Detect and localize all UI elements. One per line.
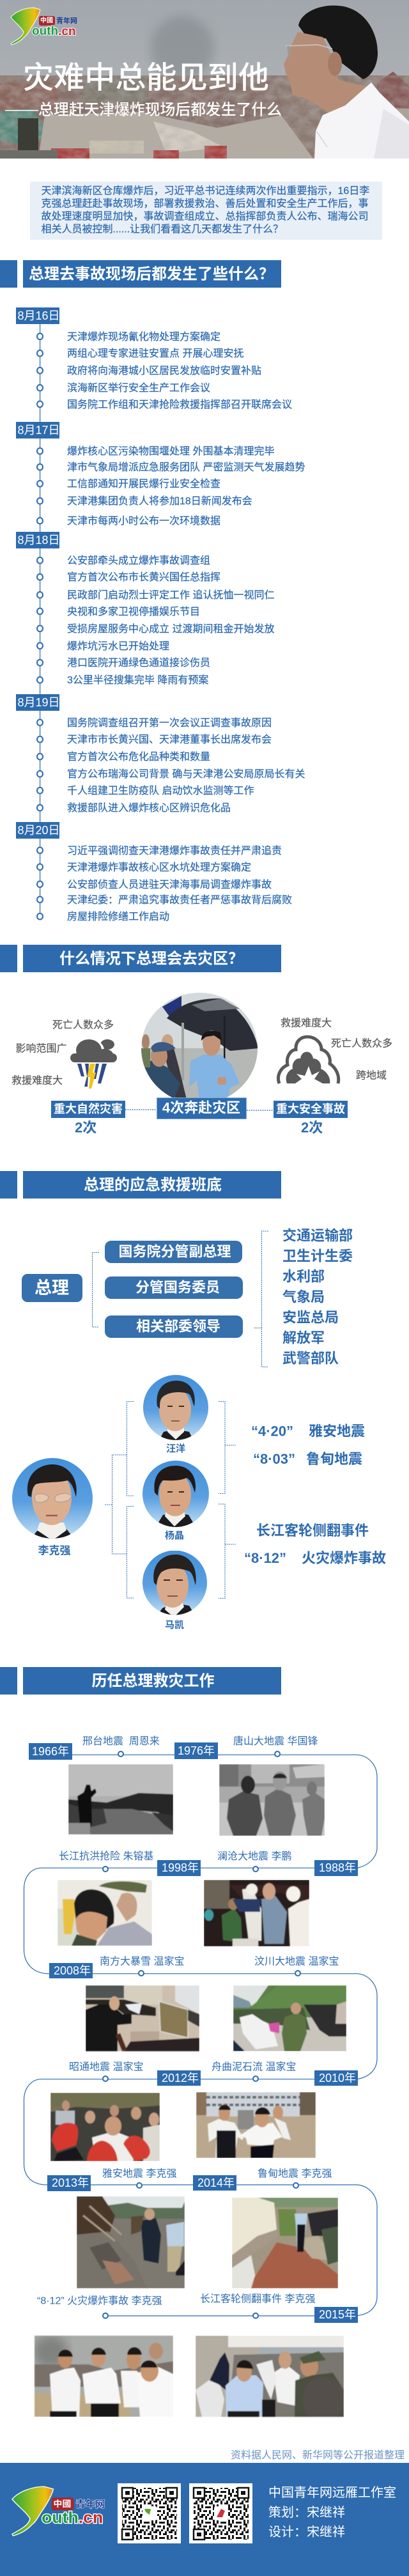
events: Yangtze and 8.12: 火灾爆炸事故 <box>302 1550 386 1566</box>
events 8月18日: 3公里半径搜集完毕 降雨有预案 <box>67 674 208 686</box>
events: Ya'an and Ludian: “8·03” <box>253 1451 295 1467</box>
footer <box>0 2463 409 2576</box>
logo: youth.cn footer: 中國 <box>53 2499 71 2509</box>
photo: 1966 Xingtai <box>68 1764 173 1835</box>
photo: 2008 snowstorm <box>86 1985 199 2052</box>
heading: when the premier goes <box>0 945 281 972</box>
left: natural disaster factors <box>12 1019 117 1089</box>
portrait: 李克强 <box>12 1458 93 1557</box>
portrait: 杨晶 <box>143 1461 209 1541</box>
portrait connectors <box>105 1401 236 1598</box>
year tags: 2013年 <box>52 2176 89 2189</box>
heading: rescue team: 总理的应急救援班底 <box>84 1176 222 1194</box>
date 8月16日: 8月16日 <box>17 309 60 322</box>
events 8月16日: 两组心理专家进驻安置点 开展心理安抚 <box>67 348 243 359</box>
logo: youth.cn footer <box>12 2487 105 2536</box>
events 8月17日 <box>37 445 305 527</box>
year tags: 1998年 <box>162 1861 199 1874</box>
right: safety accident factors: 跨地域 <box>356 1070 387 1082</box>
timeline captions: 邢台地震 周恩来 <box>82 1735 160 1747</box>
photo: 2015 Yangtze <box>196 2336 344 2423</box>
winding timeline path <box>24 1755 377 2316</box>
photo: 1998 Yangtze flood <box>58 1880 152 1946</box>
events: Ya'an and Ludian: 鲁甸地震 <box>306 1451 362 1467</box>
events: Ya'an and Ludian: 雅安地震 <box>309 1423 365 1439</box>
events 8月18日: 民政部门启动烈士评定工作 追认抚恤一视同仁 <box>67 589 274 601</box>
events 8月17日: 工信部通知开展民爆行业安全检查 <box>67 477 220 490</box>
tag: major safety accidents: 2次 <box>301 1120 323 1135</box>
right: safety accident factors <box>278 1018 392 1083</box>
hero banner <box>0 0 409 159</box>
logo: youth.cn footer: outh.cn <box>42 2510 103 2527</box>
box: ministries <box>105 1315 243 1338</box>
logo: youth.cn footer: 青年网 <box>75 2499 105 2510</box>
intro text panel: 故处理速度明显加快，事故调查组成立、总指挥部负责人公布、瑞海公司 <box>41 211 369 222</box>
box: premier: 总理 <box>35 1278 69 1298</box>
events: Ya'an and Ludian <box>251 1423 365 1467</box>
date 8月18日: 8月18日 <box>17 534 60 547</box>
date 8月20日: 8月20日 <box>17 824 60 837</box>
date 8月19日: 8月19日 <box>17 696 60 709</box>
events 8月18日: 央视和多家卫视停播娱乐节目 <box>67 606 200 617</box>
photo: 2013 Ya'an <box>77 2196 185 2288</box>
QR code 2 <box>189 2483 252 2543</box>
photo: 2012 Zhaotong <box>50 2093 160 2161</box>
events 8月20日: 天津港爆炸事故核心区水坑处理方案确定 <box>67 861 251 873</box>
heading: past premiers <box>0 1667 281 1695</box>
right: safety accident factors: 死亡人数众多 <box>331 1038 392 1050</box>
intro text panel: 天津滨海新区仓库爆炸后，习近平总书记连续两次作出重要指示，16日李 <box>41 184 369 197</box>
intro text panel: 相关人员被控制......让我们看看这几天都发生了什么？ <box>41 224 283 235</box>
year tags <box>29 1742 358 2323</box>
footer credits <box>268 2485 396 2540</box>
events 8月20日: 公安部侦查人员进驻天津海事局调查爆炸事故 <box>67 878 272 890</box>
year tags: 1976年 <box>178 1744 215 1757</box>
events: Yangtze and 8.12 <box>244 1523 386 1566</box>
events 8月16日: 政府将向海港城小区居民发放临时安置补贴 <box>67 365 261 376</box>
timeline captions: 汶川大地震 温家宝 <box>254 1956 339 1967</box>
left: natural disaster factors: 影响范围广 <box>15 1043 67 1055</box>
hero subtitle: 总理赶天津爆炸现场后都发生了什么 <box>38 101 282 119</box>
icon: explosion <box>278 1037 339 1083</box>
timeline captions: 雅安地震 李克强 <box>102 2168 176 2180</box>
events 8月20日: 房屋排险修缮工作启动 <box>67 911 169 922</box>
photo: premier under umbrella <box>141 993 258 1106</box>
logo: youth.cn top: 中國 <box>40 16 53 24</box>
events 8月16日: 天津爆炸现场氰化物处理方案确定 <box>67 330 220 343</box>
departments list: 水利部 <box>282 1268 325 1285</box>
photo: 2015 Tianjin <box>33 2335 173 2417</box>
year tags: 2014年 <box>197 2176 235 2189</box>
events 8月19日: 官方首次公布危化品种类和数量 <box>67 751 210 763</box>
events 8月19日: 官方公布瑞海公司背景 确与天津港公安局原局长有关 <box>67 768 305 780</box>
footer credits: 策划：宋继祥 <box>268 2505 345 2520</box>
footer credits: 设计：宋继祥 <box>268 2525 345 2540</box>
events 8月18日: 受损房屋服务中心成立 过渡期间租金开始发放 <box>67 623 274 635</box>
departments list: 解放军 <box>282 1330 325 1346</box>
heading: past premiers: 历任总理救灾工作 <box>92 1672 215 1690</box>
timeline captions: 长江客轮侧翻事件 李克强 <box>200 2293 315 2305</box>
photo: 2008 Wenchuan <box>233 1985 346 2051</box>
departments list: 交通运输部 <box>282 1227 353 1244</box>
portrait: 李克强: 李克强 <box>38 1544 70 1557</box>
events 8月16日 <box>37 330 292 410</box>
date 8月17日: 8月17日 <box>17 424 60 437</box>
year tags: 1966年 <box>32 1745 69 1758</box>
QR code 1 <box>118 2483 181 2543</box>
year tags: 2012年 <box>162 2072 199 2084</box>
portrait: 汪洋 <box>143 1375 208 1454</box>
events 8月16日: 国务院工作组和天津抢险救援指挥部召开联席会议 <box>67 399 292 410</box>
box: premier <box>22 1274 82 1302</box>
logo: youth.cn top <box>11 8 77 45</box>
events 8月19日 <box>37 717 305 814</box>
events 8月20日: 习近平强调彻查天津港爆炸事故责任并严肃追责 <box>67 844 282 857</box>
box: vice premier: 国务院分管副总理 <box>118 1244 231 1259</box>
photo: 1976 Tangshan <box>219 1764 325 1836</box>
tag: four visits <box>157 1098 247 1119</box>
box: vice premier <box>105 1241 242 1263</box>
left: natural disaster factors: 救援难度大 <box>12 1075 63 1087</box>
departments list: 安监总局 <box>282 1309 339 1326</box>
timeline captions: 鲁甸地震 李克强 <box>258 2168 332 2180</box>
events 8月19日: 千人组建卫生防疫队 启动饮水监测等工作 <box>67 785 254 796</box>
timeline captions: 澜沧大地震 李鹏 <box>217 1851 291 1862</box>
events: Yangtze and 8.12: 长江客轮侧翻事件 <box>256 1523 369 1539</box>
tag: major natural disasters: 重大自然灾害 <box>54 1102 123 1115</box>
tag: major natural disasters: 2次 <box>75 1120 96 1135</box>
year tags: 2010年 <box>319 2072 356 2084</box>
events 8月18日: 公安部牵头成立爆炸事故调查组 <box>67 554 210 566</box>
box: state councilor: 分管国务委员 <box>135 1280 220 1295</box>
events 8月19日: 国务院调查组召开第一次会议正调查事故原因 <box>67 717 272 729</box>
events 8月19日: 天津市市长黄兴国、天津港董事长出席发布会 <box>67 734 272 745</box>
timeline captions: 昭通地震 温家宝 <box>69 2061 143 2072</box>
photo: 2010 Zhouqu <box>196 2092 316 2158</box>
timeline captions <box>37 1735 339 2306</box>
photo: 1988 Lancang <box>204 1880 309 1946</box>
timeline captions: 唐山大地震 华国锋 <box>233 1735 318 1747</box>
tag: four visits: 4次奔赴灾区 <box>162 1099 240 1116</box>
events 8月17日: 津市气象局增派应急服务团队 严密监测天气发展趋势 <box>67 461 305 473</box>
right: safety accident factors: 救援难度大 <box>281 1018 332 1029</box>
events 8月16日: 滨海新区举行安全生产工作会议 <box>67 382 210 394</box>
heading: when the premier goes: 什么情况下总理会去灾区？ <box>59 950 243 968</box>
events 8月20日: 天津纪委：严肃追究事故责任者严惩事故背后腐败 <box>67 894 292 906</box>
hero title: 灾难中总能见到他 <box>23 61 269 95</box>
timeline: daily events <box>16 307 305 922</box>
year tags: 2015年 <box>319 2308 356 2321</box>
departments list: 卫生计生委 <box>282 1248 353 1264</box>
events 8月17日: 天津市每两小时公布一次环境数据 <box>67 515 220 527</box>
heading: what happened <box>0 260 281 288</box>
events 8月17日: 天津港集团负责人将参加18日新闻发布会 <box>67 495 252 507</box>
timeline captions: 舟曲泥石流 温家宝 <box>212 2061 296 2072</box>
events 8月19日: 救援部队进入爆炸核心区辨识危化品 <box>67 802 231 814</box>
tag: major natural disasters <box>51 1101 125 1135</box>
org chart <box>22 1227 353 1367</box>
box: state councilor <box>105 1276 243 1299</box>
left: natural disaster factors: 死亡人数众多 <box>52 1019 114 1030</box>
source note: 资料据人民网、新华网等公开报道整理 <box>231 2449 405 2461</box>
tag: major safety accidents: 重大安全事故 <box>276 1102 345 1115</box>
events 8月18日: 港口医院开通绿色通道接诊伤员 <box>67 657 210 669</box>
portrait: 马凯 <box>143 1551 207 1631</box>
logo: youth.cn top: outh.cn <box>32 24 76 38</box>
departments list: 武警部队 <box>282 1350 339 1367</box>
events 8月18日: 爆炸坑污水已开始处理 <box>67 640 169 652</box>
portrait: 汪洋: 汪洋 <box>166 1443 185 1454</box>
portrait: 杨晶: 杨晶 <box>165 1530 184 1541</box>
events: Ya'an and Ludian: “4·20” <box>251 1423 293 1439</box>
box: ministries: 相关部委领导 <box>136 1318 220 1335</box>
events 8月20日 <box>37 844 292 922</box>
icon: storm cloud <box>70 1039 117 1089</box>
events 8月18日 <box>37 554 274 686</box>
timeline captions: 南方大暴雪 温家宝 <box>100 1956 184 1967</box>
events 8月17日: 爆炸核心区污染物围堰处理 外围基本清理完毕 <box>67 445 274 457</box>
tag: major safety accidents <box>274 1101 348 1135</box>
intro text panel <box>30 182 382 240</box>
intro text panel: 克强总理赶赴事故现场，部署救援救治、善后处置和安全生产工作后，事 <box>41 198 369 210</box>
logo: youth.cn top: 青年网 <box>56 16 77 25</box>
events 8月18日: 官方首次公布市长黄兴国任总指挥 <box>67 571 220 583</box>
heading: rescue team <box>0 1171 281 1199</box>
portrait: 马凯: 马凯 <box>165 1620 184 1631</box>
events: Yangtze and 8.12: “8·12” <box>244 1550 286 1566</box>
timeline markers <box>103 1751 300 2318</box>
photo: 2014 Ludian <box>232 2198 338 2288</box>
heading: what happened: 总理去事故现场后都发生了些什么？ <box>29 266 274 283</box>
departments list <box>282 1227 353 1367</box>
year tags: 1988年 <box>319 1861 356 1874</box>
departments list: 气象局 <box>282 1289 325 1305</box>
year tags: 2008年 <box>54 1964 91 1977</box>
timeline captions: “8·12” 火灾爆炸事故 李克强 <box>37 2295 162 2306</box>
timeline captions: 长江抗洪抢险 朱镕基 <box>59 1851 153 1862</box>
footer credits: 中国青年网远雁工作室 <box>268 2485 396 2500</box>
